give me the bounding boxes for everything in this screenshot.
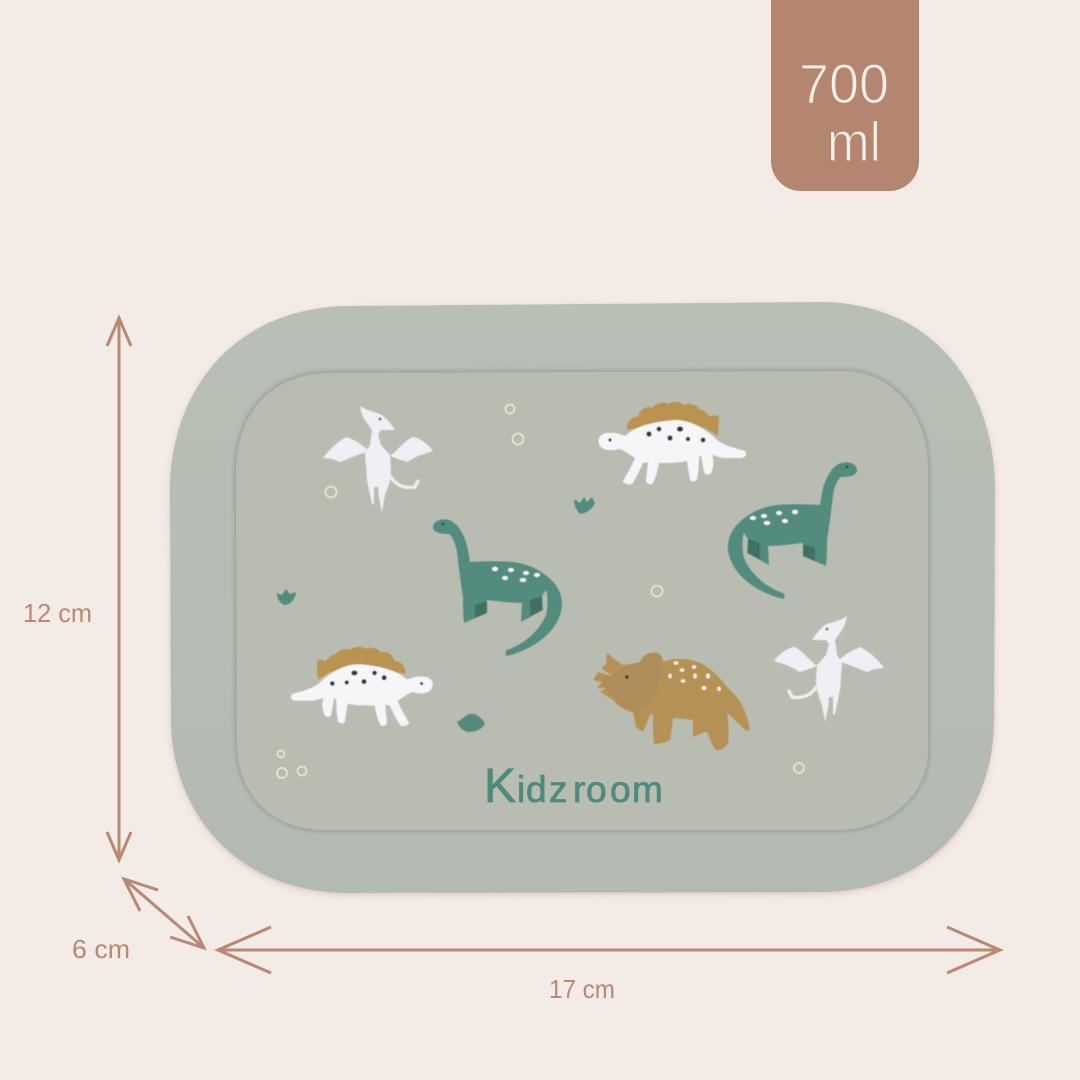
brand logo: i <box>517 769 525 810</box>
volume badge <box>771 0 919 191</box>
arrow: width <box>218 927 1000 973</box>
bubbles <box>277 404 804 778</box>
dinosaur: pterodactyl bottom right <box>774 616 884 722</box>
brand logo: d <box>526 769 547 810</box>
dinosaur: triceratops <box>593 652 749 750</box>
dinosaur: pterodactyl top left <box>323 406 433 512</box>
dinosaur: brontosaurus right <box>728 462 857 599</box>
footprints <box>277 497 595 732</box>
inner panel shadow <box>236 371 928 830</box>
lid shadow <box>170 304 995 895</box>
volume badge: 700 <box>799 52 889 115</box>
label: width: 17 cm <box>549 974 615 1004</box>
brand logo: z <box>549 769 568 810</box>
brand logo: o <box>586 769 607 810</box>
brand logo: r <box>573 769 585 810</box>
brand logo: m <box>632 769 663 810</box>
label: depth: 6 cm <box>72 934 130 964</box>
inner panel <box>236 371 928 830</box>
lid rim <box>170 302 995 893</box>
arrow: depth <box>124 879 204 948</box>
volume badge: ml <box>827 110 881 173</box>
arrow: height <box>107 318 131 860</box>
dinosaur: brontosaurus centre <box>433 519 562 656</box>
label: height: 12 cm <box>23 598 92 628</box>
brand logo: o <box>610 769 631 810</box>
brand logo: K <box>484 760 516 813</box>
dinosaur: stegosaurus top <box>598 402 746 484</box>
dinosaur: stegosaurus bottom left <box>291 647 433 726</box>
lunchbox lid <box>170 302 995 895</box>
